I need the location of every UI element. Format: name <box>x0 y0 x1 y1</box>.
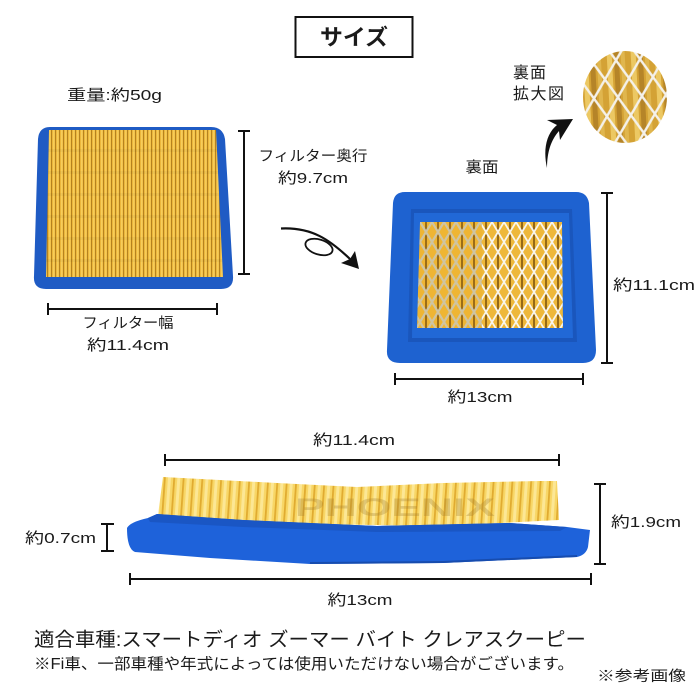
side height label: 約1.9cm <box>611 514 681 531</box>
filter front photo <box>34 127 233 289</box>
depth label: フィルター奥行 <box>258 148 368 165</box>
width label: 約11.4cm <box>87 337 169 354</box>
width label: フィルター幅 <box>82 315 174 332</box>
thickness dimension line <box>101 524 114 551</box>
arrow: to zoomed view <box>545 119 573 168</box>
zoomed mesh circle <box>583 51 667 143</box>
zoom label: 拡大図 <box>513 85 564 103</box>
back height label: 約11.1cm <box>613 277 695 294</box>
back height dimension line <box>601 193 613 363</box>
width label <box>82 315 174 354</box>
title: サイズ <box>320 25 388 50</box>
depth label: 約9.7cm <box>278 170 348 187</box>
reference image note: ※参考画像 <box>597 668 687 685</box>
back label: 裏面 <box>466 159 498 176</box>
zoom label <box>513 64 564 103</box>
back width dimension line <box>395 373 583 385</box>
depth label <box>258 148 368 187</box>
title <box>296 17 412 57</box>
watermark: PHOENIX <box>295 494 496 522</box>
side width label: 約11.4cm <box>313 432 395 449</box>
side width dimension line <box>165 454 559 466</box>
depth dimension line <box>238 131 250 274</box>
zoom label: 裏面 <box>513 64 546 82</box>
width dimension line <box>48 303 217 315</box>
thickness label: 約0.7cm <box>25 530 96 547</box>
side length dimension line <box>130 573 591 585</box>
back width label: 約13cm <box>448 389 512 406</box>
side height dimension line <box>594 484 606 564</box>
arrow: front to back <box>281 228 359 269</box>
filter back photo <box>387 192 596 363</box>
side length label: 約13cm <box>328 592 392 609</box>
filter side photo <box>127 477 590 564</box>
weight label: 重量:約50g <box>67 87 162 104</box>
compatibility note: ※Fi車、一部車種や年式によっては使用いただけない場合がございます。 <box>34 654 574 673</box>
compatible models: 適合車種:スマートディオ ズーマー バイト クレアスクーピー <box>34 629 586 651</box>
